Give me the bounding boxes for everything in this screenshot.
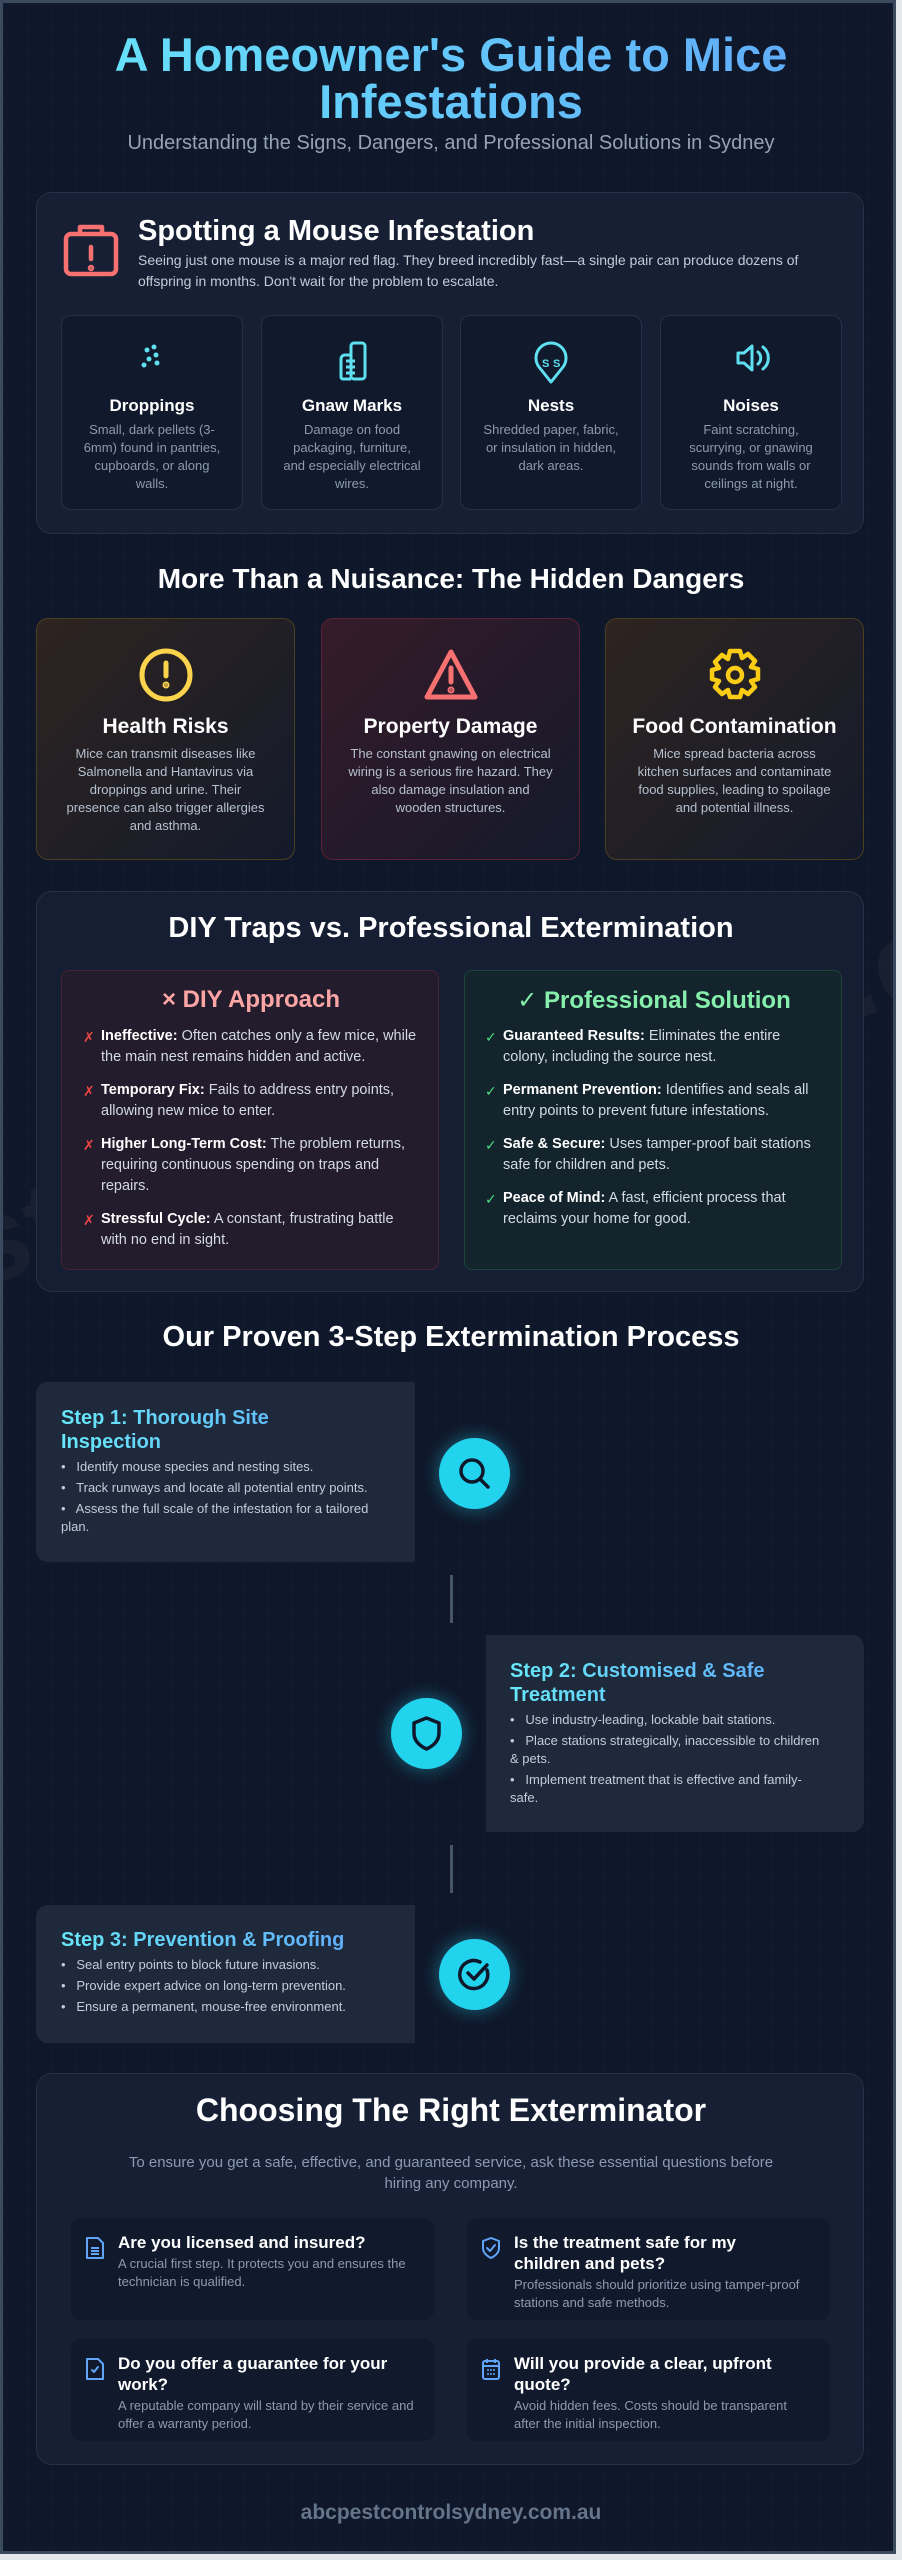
list: Peace of Mind: A fast, efficient process that reclaims your home for good. bbox=[503, 1190, 786, 1227]
list: Permanent Prevention: Identifies and seals all entry points to prevent future infestations. bbox=[503, 1082, 808, 1119]
card: nests: S bbox=[553, 358, 560, 370]
sub-panel: DIY: ✗ bbox=[83, 1137, 95, 1153]
card: nests: S bbox=[542, 358, 549, 370]
question: licensed: A crucial first step. It protects you and ensures the technician is qualified. bbox=[118, 2256, 406, 2289]
card: nests: Shredded paper, fabric, or insulation in hidden, dark areas. bbox=[483, 422, 619, 473]
step 3: • Provide expert advice on long-term prevention. bbox=[61, 1978, 346, 1993]
list bbox=[83, 1028, 416, 1248]
step 1: • Identify mouse species and nesting sites. bbox=[61, 1459, 313, 1474]
step 3: • Ensure a permanent, mouse-free environment. bbox=[61, 1999, 346, 2014]
question: guarantee bbox=[71, 2339, 434, 2441]
sub-panel: DIY: ✗ bbox=[83, 1212, 95, 1228]
card: noises: Faint scratching, scurrying, or gnawing sounds from walls or ceilings at night. bbox=[689, 422, 813, 491]
sub-panel: DIY: ✗ bbox=[83, 1083, 95, 1099]
sub-panel: professional: ✓ bbox=[485, 1083, 497, 1099]
subheading: × DIY Approach bbox=[162, 986, 340, 1013]
card: nests bbox=[460, 315, 642, 510]
step 1: • Assess the full scale of the infestation for a tailored plan. bbox=[61, 1501, 368, 1534]
panel: spotting infestation bbox=[36, 192, 864, 534]
card: health risks bbox=[36, 618, 295, 860]
subtitle: Understanding the Signs, Dangers, and Professional Solutions in Sydney bbox=[127, 132, 775, 154]
list: Higher Long-Term Cost: The problem returns, requiring continuous spending on traps and repairs. bbox=[101, 1136, 405, 1194]
step 1: Inspection bbox=[61, 1431, 161, 1453]
sub-panel: professional bbox=[464, 970, 842, 1270]
list: Guaranteed Results: Eliminates the entire colony, including the source nest. bbox=[503, 1028, 780, 1065]
list: Temporary Fix: Fails to address entry points, allowing new mice to enter. bbox=[101, 1082, 394, 1119]
question: licensed: Are you licensed and insured? bbox=[118, 2233, 366, 2252]
step 2: Step 2: Customised & Safe bbox=[510, 1660, 765, 1682]
step 3 bbox=[36, 1905, 415, 2043]
step 1: Step 1: Thorough Site bbox=[61, 1407, 269, 1429]
sub-panel: DIY: ✗ bbox=[83, 1029, 95, 1045]
step 3: Step 3: Prevention & Proofing bbox=[61, 1929, 344, 1951]
panel: choosing exterminator bbox=[36, 2073, 864, 2465]
card: noises bbox=[660, 315, 842, 510]
icon: search circle bbox=[439, 1438, 510, 1509]
question: guarantee: A reputable company will stand by their service and offer a warranty period. bbox=[118, 2398, 414, 2431]
step 3: • Seal entry points to block future invasions. bbox=[61, 1957, 320, 1972]
step 2: • Use industry-leading, lockable bait stations. bbox=[510, 1712, 775, 1727]
card: property damage: The constant gnawing on electrical wiring is a serious fire hazard. They also damage insulation and wooden structures. bbox=[348, 746, 553, 815]
icon: alert briefcase bbox=[64, 224, 118, 276]
panel: DIY vs professional bbox=[36, 891, 864, 1292]
step 1 bbox=[36, 1382, 415, 1562]
card: health risks: Health Risks bbox=[102, 715, 229, 738]
card: food contamination: Food Contamination bbox=[632, 715, 837, 738]
title: A Homeowner's Guide to Mice bbox=[115, 28, 787, 81]
list: Ineffective: Often catches only a few mice, while the main nest remains hidden and active. bbox=[101, 1028, 416, 1065]
question: quote bbox=[467, 2339, 830, 2441]
card: gnaw marks bbox=[261, 315, 443, 510]
card: droppings: Small, dark pellets (3-6mm) found in pantries, cupboards, or along walls. bbox=[84, 422, 220, 491]
question: guarantee: Do you offer a guarantee for your work? bbox=[118, 2354, 387, 2394]
title bbox=[3, 31, 899, 125]
sub-panel: professional: ✓ bbox=[485, 1191, 497, 1207]
question: quote: Avoid hidden fees. Costs should be transparent after the initial inspection. bbox=[514, 2398, 787, 2431]
card: droppings: Droppings bbox=[110, 396, 194, 415]
text: Seeing just one mouse is a major red flag. They breed incredibly fast—a single pair can produce dozens of offspring in months. Don't wait for the problem to escalate. bbox=[138, 252, 798, 289]
question: safe bbox=[467, 2218, 830, 2320]
heading: Choosing The Right Exterminator bbox=[196, 2092, 706, 2128]
sub-panel: professional: ✓ bbox=[485, 1029, 497, 1045]
card: nests: Nests bbox=[528, 396, 574, 415]
sub-panel: professional: ✓ bbox=[485, 1137, 497, 1153]
card: property damage: Property Damage bbox=[364, 715, 537, 738]
question: safe: Is the treatment safe for my children and pets? bbox=[514, 2233, 736, 2273]
icon: shield circle bbox=[391, 1698, 462, 1769]
icon: check circle bbox=[439, 1939, 510, 2010]
step 2: Treatment bbox=[510, 1684, 606, 1706]
heading: hidden dangers: More Than a Nuisance: The Hidden Dangers bbox=[158, 563, 744, 594]
step 2: • Implement treatment that is effective and family-safe. bbox=[510, 1772, 802, 1805]
question: licensed bbox=[71, 2218, 434, 2320]
heading: Spotting a Mouse Infestation bbox=[138, 215, 534, 247]
card: noises: Noises bbox=[723, 396, 779, 415]
step 2 bbox=[486, 1635, 864, 1832]
card: health risks: Mice can transmit diseases like Salmonella and Hantavirus via droppings and urine. Their presence can also trigger allergies and asthma. bbox=[66, 746, 264, 833]
sub-panel: DIY bbox=[61, 970, 439, 1270]
card: food contamination bbox=[605, 618, 864, 860]
heading: DIY Traps vs. Professional Extermination bbox=[168, 912, 734, 944]
heading: 3-step process: Our Proven 3-Step Extermination Process bbox=[163, 1321, 739, 1353]
card: property damage bbox=[321, 618, 580, 860]
step 2: • Place stations strategically, inaccessible to children & pets. bbox=[510, 1733, 819, 1766]
card: droppings bbox=[61, 315, 243, 510]
list: Safe & Secure: Uses tamper-proof bait stations safe for children and pets. bbox=[503, 1136, 811, 1173]
list: Stressful Cycle: A constant, frustrating battle with no end in sight. bbox=[101, 1211, 394, 1248]
question: safe: Professionals should prioritize using tamper-proof stations and safe methods. bbox=[514, 2277, 799, 2310]
card: gnaw marks: Damage on food packaging, furniture, and especially electrical wires. bbox=[283, 422, 421, 491]
step 1: • Track runways and locate all potential entry points. bbox=[61, 1480, 368, 1495]
intro: To ensure you get a safe, effective, and guaranteed service, ask these essential questions before hiring any company. bbox=[129, 2154, 773, 2192]
list bbox=[485, 1028, 811, 1227]
question: quote: Will you provide a clear, upfront quote? bbox=[514, 2354, 772, 2394]
title: Infestations bbox=[319, 75, 583, 128]
footer: abcpestcontrolsydney.com.au bbox=[301, 2501, 601, 2524]
subheading: ✓ Professional Solution bbox=[517, 987, 791, 1014]
card: food contamination: Mice spread bacteria across kitchen surfaces and contaminate food supplies, leading to spoilage and potential illness. bbox=[638, 746, 831, 815]
card: gnaw marks: Gnaw Marks bbox=[302, 396, 402, 415]
